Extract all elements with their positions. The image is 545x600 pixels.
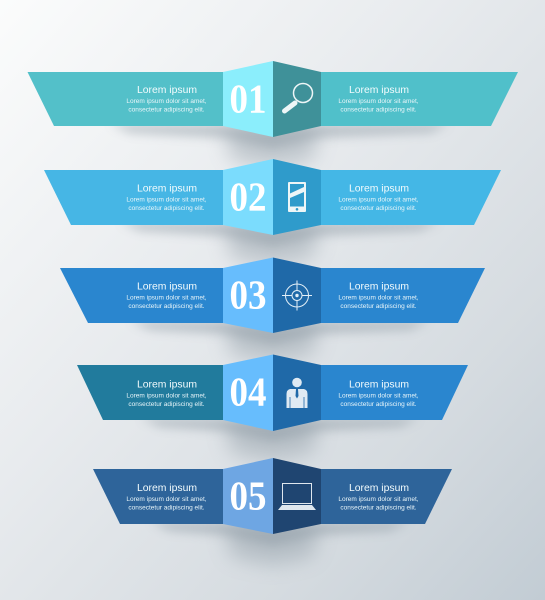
right band: [321, 469, 452, 524]
right text: Lorem ipsum dolor sit amet,: [338, 294, 419, 302]
right text: [338, 483, 419, 512]
left text: [126, 483, 207, 512]
left band: [60, 268, 223, 323]
left text: consectetur adipiscing elit.: [128, 106, 205, 114]
icon: magnifying glass: [284, 84, 312, 111]
left text: consectetur adipiscing elit.: [128, 504, 205, 512]
left text: Lorem ipsum: [137, 282, 197, 292]
left text: [126, 85, 207, 114]
panel: step 02: [44, 159, 501, 266]
number: 01: [230, 76, 266, 122]
number panel: [223, 458, 273, 534]
right band: [321, 170, 501, 225]
left band: [28, 72, 223, 126]
number panel: [223, 258, 273, 333]
right text: Lorem ipsum: [349, 184, 409, 194]
right text: Lorem ipsum dolor sit amet,: [338, 392, 419, 400]
number: 05: [230, 472, 266, 518]
number: 02: [230, 174, 266, 220]
panel: step 01: [28, 61, 518, 168]
left text: Lorem ipsum: [137, 483, 197, 494]
left text: Lorem ipsum dolor sit amet,: [126, 98, 207, 105]
left band: [77, 365, 223, 420]
icon panel: [273, 458, 321, 534]
number panel: [223, 61, 273, 137]
right text: Lorem ipsum: [349, 85, 409, 96]
left text: Lorem ipsum dolor sit amet,: [126, 392, 207, 400]
right text: consectetur adipiscing elit.: [340, 106, 417, 114]
left text: Lorem ipsum: [137, 85, 197, 96]
right text: Lorem ipsum dolor sit amet,: [338, 98, 419, 105]
right text: consectetur adipiscing elit.: [340, 303, 417, 310]
left text: Lorem ipsum dolor sit amet,: [126, 294, 207, 302]
right text: Lorem ipsum: [349, 483, 409, 494]
left text: Lorem ipsum dolor sit amet,: [126, 196, 207, 204]
right text: [338, 85, 419, 114]
icon: businessman: [286, 378, 308, 408]
number: 03: [230, 272, 266, 318]
left band: [93, 469, 223, 524]
number panel: [223, 354, 273, 431]
icon panel: [273, 258, 321, 333]
right text: [338, 184, 419, 212]
right text: Lorem ipsum: [349, 282, 409, 292]
icon panel: [273, 159, 321, 235]
right text: [338, 282, 419, 310]
right band: [321, 365, 468, 420]
icon: target: [282, 280, 312, 310]
right band: [321, 72, 518, 126]
left text: consectetur adipiscing elit.: [128, 303, 205, 310]
left text: [126, 380, 207, 408]
left text: consectetur adipiscing elit.: [128, 401, 205, 408]
left band: [44, 170, 223, 225]
right band: [321, 268, 485, 323]
icon panel: [273, 61, 321, 137]
right text: Lorem ipsum dolor sit amet,: [338, 196, 419, 204]
panel: step 03: [60, 258, 485, 363]
panel: step 04: [77, 354, 468, 461]
right text: consectetur adipiscing elit.: [340, 401, 417, 408]
right text: consectetur adipiscing elit.: [340, 205, 417, 212]
right text: Lorem ipsum dolor sit amet,: [338, 496, 419, 503]
right text: consectetur adipiscing elit.: [340, 504, 417, 512]
left text: consectetur adipiscing elit.: [128, 205, 205, 212]
icon: laptop: [278, 484, 316, 510]
panel: step 05: [93, 458, 452, 565]
left text: Lorem ipsum dolor sit amet,: [126, 496, 207, 503]
right text: Lorem ipsum: [349, 380, 409, 390]
number: 04: [230, 368, 266, 414]
left text: [126, 184, 207, 212]
right text: [338, 380, 419, 408]
number panel: [223, 159, 273, 235]
icon: smartphone: [288, 182, 306, 212]
icon panel: [273, 354, 321, 431]
left text: Lorem ipsum: [137, 380, 197, 390]
left text: [126, 282, 207, 310]
left text: Lorem ipsum: [137, 184, 197, 194]
